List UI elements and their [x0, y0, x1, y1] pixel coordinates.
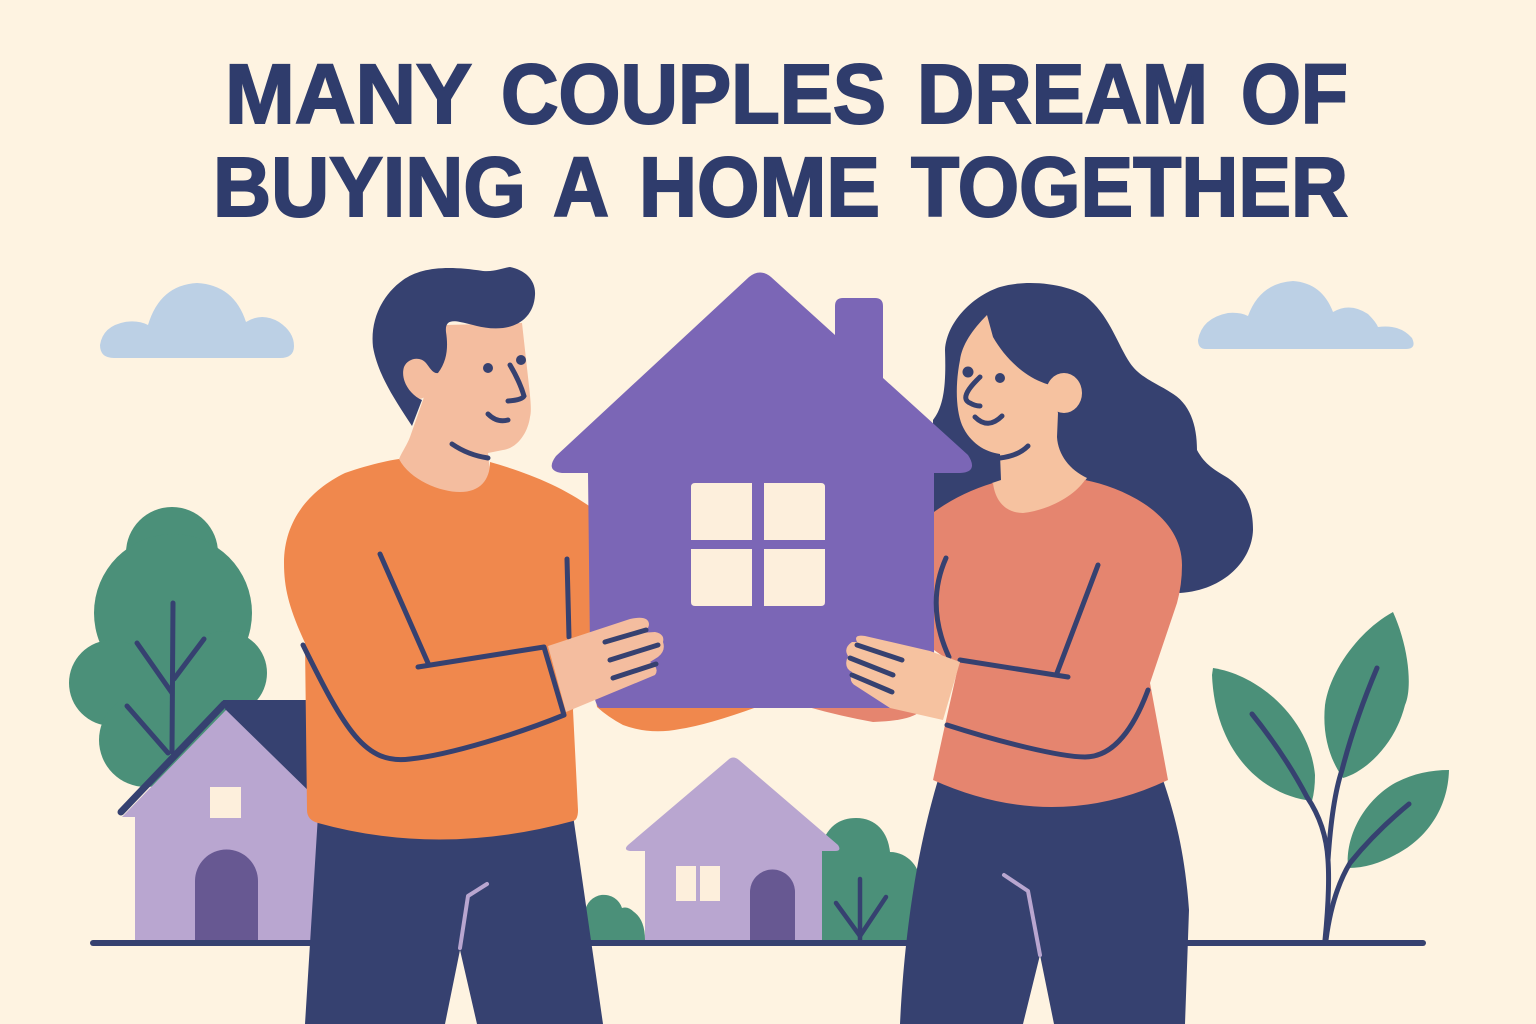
woman face lines: [966, 377, 1028, 458]
house roof dark: [223, 700, 312, 800]
plant leaf left: [1212, 668, 1315, 801]
man eyes: [483, 355, 526, 373]
tree foliage: [69, 507, 267, 787]
house main shape: [552, 272, 972, 708]
house window: [210, 787, 241, 818]
house door: [195, 850, 258, 940]
tree branches: [127, 603, 204, 753]
man pants seam: [460, 884, 487, 948]
woman hand: [846, 636, 960, 720]
title line 1: DREAM: [917, 47, 1208, 141]
house window panes: [691, 483, 825, 606]
man arm: [303, 554, 664, 760]
woman arm lines: [936, 558, 1148, 757]
bush right of center house: [820, 818, 921, 940]
cloud right: [1198, 281, 1414, 349]
woman ear: [1046, 373, 1082, 413]
plant leaf top: [1324, 612, 1409, 778]
plant stems: [1252, 668, 1409, 940]
title line 2: A: [553, 140, 609, 234]
blob under house left: [596, 700, 757, 731]
woman hair: [933, 283, 1253, 593]
title line 2: BUYING: [213, 140, 526, 234]
center house roof and body: [626, 758, 839, 940]
title line 2: [213, 140, 1348, 234]
house roof edge: [121, 704, 224, 812]
house back left: [121, 700, 320, 940]
bush foliage: [820, 818, 921, 940]
house held by couple: [552, 272, 972, 731]
center house window: [676, 866, 720, 901]
man hand: [548, 618, 664, 712]
title line 1: [225, 47, 1348, 141]
man hair: [373, 267, 535, 426]
man sweater: [284, 459, 592, 840]
title line 1: MANY: [225, 47, 472, 141]
cloud left: [100, 283, 294, 358]
man ear: [401, 357, 435, 399]
woman pants seam: [1004, 875, 1040, 955]
house back center: [626, 758, 839, 940]
ground line: [93, 940, 1423, 946]
man figure: [284, 267, 603, 1024]
title line 2: TOGETHER: [911, 140, 1348, 234]
bush small left: [585, 895, 645, 940]
woman fingers: [850, 645, 902, 692]
woman figure: [846, 315, 1189, 1024]
title: [213, 47, 1348, 234]
woman sweater: [933, 480, 1182, 807]
tree left: [69, 507, 267, 787]
plant leaf right: [1348, 770, 1449, 868]
title line 1: OF: [1241, 47, 1348, 141]
bush branches: [836, 879, 886, 940]
man pants: [305, 815, 603, 1024]
blob under house right: [808, 702, 925, 722]
woman eyes: [962, 366, 1005, 383]
man face lines: [452, 365, 524, 458]
title line 1: COUPLES: [501, 47, 886, 141]
title line 2: HOME: [639, 140, 880, 234]
woman neck and face: [957, 315, 1087, 520]
man neck and head: [399, 323, 531, 500]
center house door: [750, 870, 795, 940]
plant right: [1212, 612, 1449, 940]
man fingers: [605, 630, 658, 678]
man arm lines: [303, 554, 569, 760]
woman pants: [900, 780, 1189, 1024]
house body: [122, 710, 320, 940]
